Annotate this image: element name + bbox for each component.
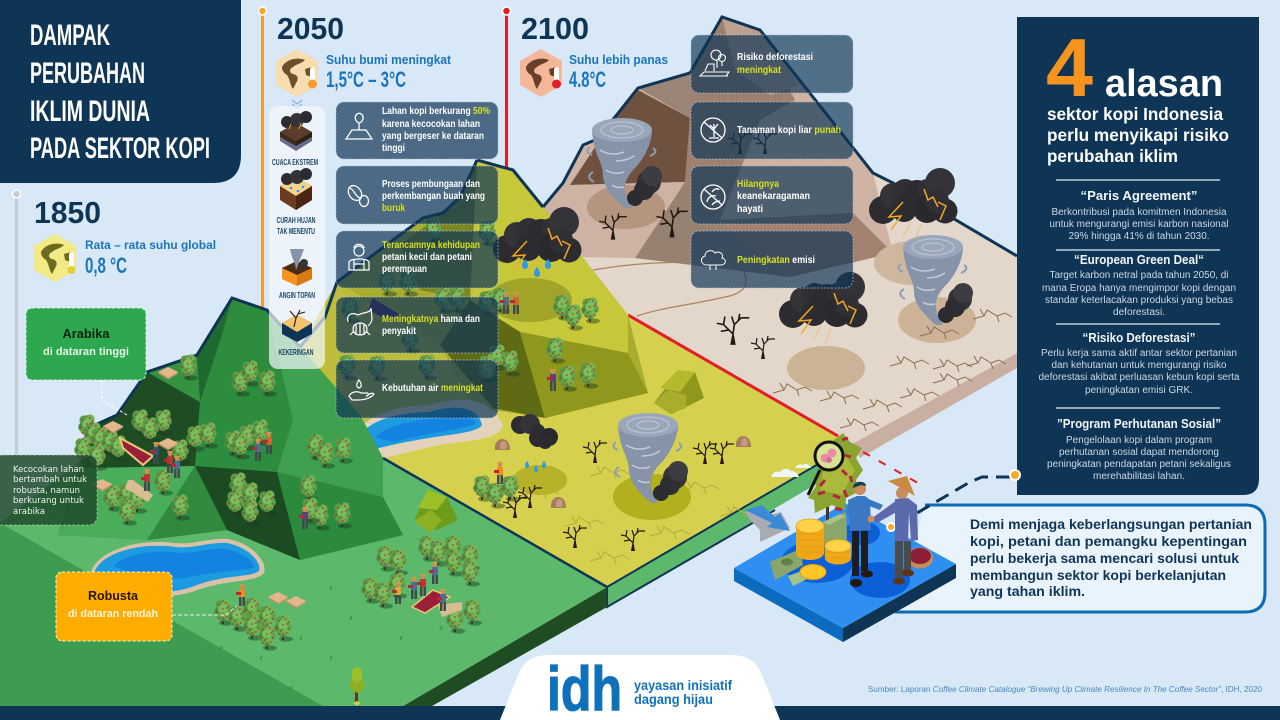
label: curah hujan: CURAH HUJAN	[276, 215, 316, 225]
small isometric tree	[350, 667, 364, 706]
panel: kehidupan petani: perempuan	[382, 264, 427, 275]
panel: pembungaan: Proses pembungaan dan	[382, 179, 480, 190]
reason: Program Perhutanan Sosial: Pengelolaan kopi dalam program	[1066, 435, 1212, 446]
reason: Risiko Deforestasi: “Risiko Deforestasi”	[1082, 331, 1196, 345]
section: 2100	[520, 11, 668, 97]
label: arabika	[26, 308, 146, 380]
farmers	[141, 292, 556, 611]
panel: hama dan penyakit	[336, 297, 498, 353]
panel: lahan kopi: Lahan kopi berkurang 50%	[382, 106, 490, 117]
reason: Risiko Deforestasi	[1038, 331, 1240, 396]
callout: kecocokan lahan: bertambah untuk	[13, 475, 87, 485]
icon: globe 2050	[276, 49, 318, 97]
panel: kebutuhan air: Kebutuhan air meningkat	[382, 383, 484, 394]
panel: hama dan penyakit: penyakit	[382, 326, 417, 337]
panels: 2100 impacts	[691, 35, 853, 288]
bare trees	[503, 131, 777, 551]
panel: 4 alasan: alasan	[1105, 63, 1223, 105]
terrain: 2100 dry land and brown mountain	[543, 17, 1017, 458]
panel: kopi liar punah: Tanaman kopi liar punah	[737, 125, 841, 136]
reason: European Green Deal: mana Eropa hanya mengimpor kopi dengan	[1042, 283, 1236, 294]
tornadoes	[587, 118, 973, 503]
footer bar	[0, 706, 1280, 720]
reason: European Green Deal: Target karbon netral pada tahun 2050, di	[1050, 270, 1228, 281]
panels: 2050 impacts	[336, 102, 498, 418]
title block	[0, 0, 241, 183]
reason: European Green Deal	[1042, 253, 1236, 318]
panel: 4 alasan	[1017, 17, 1259, 495]
reason: Program Perhutanan Sosial	[1047, 417, 1231, 482]
terrain: green mountain	[58, 298, 403, 560]
section: 2050	[276, 11, 452, 97]
panel: peningkatan emisi	[691, 231, 853, 288]
dot	[887, 523, 895, 531]
title block: PADA SEKTOR KOPI	[30, 132, 210, 165]
reason: Program Perhutanan Sosial: peningkatan pendapatan petani sekaligus	[1047, 459, 1231, 470]
section: 1850: Rata – rata suhu global	[85, 238, 216, 252]
reason: European Green Deal: deforestasi.	[1113, 307, 1165, 318]
storm clouds	[493, 168, 958, 472]
stumps	[495, 436, 751, 508]
connector: robusta	[172, 606, 237, 615]
panel: risiko deforestasi	[691, 35, 853, 93]
title block: PERUBAHAN	[30, 57, 145, 90]
callout: kecocokan lahan	[0, 455, 97, 525]
section: 1850: 0,8 °C	[85, 253, 127, 278]
arrow	[745, 505, 790, 542]
section: 2100: Suhu lebih panas	[569, 53, 668, 67]
dry cracks	[773, 309, 1012, 431]
callout: kecocokan lahan: arabika	[13, 507, 45, 517]
label: kekeringan: KEKERINGAN	[278, 347, 314, 357]
title block: DAMPAK	[30, 19, 110, 52]
label: arabika: Arabika	[62, 327, 111, 341]
panel: kebutuhan air	[336, 360, 498, 418]
callout: kecocokan lahan: berkurang untuk	[13, 496, 84, 506]
panel: kehidupan petani: petani kecil dan petani	[382, 252, 472, 263]
reason: European Green Deal: “European Green Deal“	[1074, 253, 1204, 267]
panel: keanekaragaman hayati: Hilangnya	[737, 179, 779, 190]
coffee trees: yellow mountain	[338, 217, 600, 509]
person: farmer with conical hat	[868, 476, 918, 584]
callout: kecocokan lahan: Kecocokan lahan	[13, 465, 84, 475]
label: cuaca ekstrem: CUACA EKSTREM	[272, 157, 318, 167]
panel: 4 alasan: sektor kopi Indonesia	[1047, 104, 1223, 124]
reason: European Green Deal: standar keterlacakan produksi yang bebas	[1045, 295, 1233, 306]
coffee tree	[808, 433, 863, 522]
reason: Risiko Deforestasi: Perlu kerja sama aktif antar sektor pertanian	[1041, 348, 1237, 359]
small white clouds	[771, 464, 811, 477]
panel: 4 alasan: perlu menyikapi risiko	[1047, 125, 1229, 145]
panel: keanekaragaman hayati	[691, 166, 853, 224]
lake: upper	[350, 400, 503, 458]
rocks: yellow	[654, 370, 704, 414]
timeline: 2050 line	[258, 7, 266, 312]
callout: solusi: kopi, petani dan pemangku kepentingan	[970, 534, 1247, 549]
timeline: 2100 line	[502, 7, 510, 170]
icon: cuaca ekstrem block	[280, 111, 312, 151]
panel: keanekaragaman hayati: keanekaragaman	[737, 191, 810, 202]
reason: Paris Agreement: 29% hingga 41% di tahun 2030.	[1068, 231, 1210, 242]
coffee trees: green area	[74, 354, 482, 651]
icon: curah hujan block	[280, 168, 312, 210]
panel: risiko deforestasi: Risiko deforestasi	[737, 52, 813, 63]
logo: idh tab: yayasan inisiatif	[634, 678, 732, 693]
panel: risiko deforestasi: meningkat	[737, 65, 782, 76]
section: 2050: Suhu bumi meningkat	[326, 53, 452, 67]
callout: solusi: membangun sektor kopi berkelanjutan	[970, 568, 1226, 583]
terrain: 2050 yellow plane	[383, 315, 852, 607]
source note: Sumber: Laporan Coffee Climate Catalogue “Brewing Up Climate Resilience In The Coffee Sector” , IDH, 2020	[868, 685, 1263, 694]
lake: lower	[90, 539, 265, 597]
money	[770, 512, 847, 586]
label: curah hujan: TAK MENENTU	[277, 226, 315, 236]
reason: Risiko Deforestasi: peningkatan emisi GRK.	[1085, 385, 1193, 396]
timeline: 1850 line	[12, 190, 20, 460]
red dashed line	[863, 452, 918, 483]
connector: arabika	[102, 381, 127, 415]
reason: Program Perhutanan Sosial: perhutanan sosial dapat mendorong	[1059, 447, 1219, 458]
person: man in blue sweater	[846, 482, 883, 587]
callout: solusi	[895, 505, 1265, 612]
ground shadows	[513, 185, 976, 520]
section: 2050: 1,5°C – 3°C	[326, 67, 406, 92]
title block: IKLIM DUNIA	[30, 95, 150, 128]
label: robusta: Robusta	[88, 589, 139, 603]
panel: pembungaan	[336, 166, 498, 224]
reason: Program Perhutanan Sosial: ”Program Perhutanan Sosial”	[1057, 417, 1221, 431]
callout: kecocokan lahan: robusta, namun	[13, 486, 80, 496]
label: angin topan: ANGIN TOPAN	[279, 290, 315, 300]
panel: lahan kopi	[336, 102, 498, 159]
section: 1850	[34, 195, 216, 282]
section: 2050: 2050	[277, 11, 344, 46]
panel: lahan kopi: tinggi	[382, 143, 405, 154]
panel: 4 alasan: perubahan iklim	[1047, 146, 1178, 166]
panel: keanekaragaman hayati: hayati	[737, 204, 763, 215]
callout: solusi: Demi menjaga keberlangsungan pertanian	[970, 517, 1252, 532]
terrain: green plane	[0, 458, 607, 706]
panel: hama dan penyakit: Meningkatnya hama dan	[382, 314, 480, 325]
callout: solusi: perlu bekerja sama mencari solusi untuk	[970, 551, 1239, 566]
reason: Paris Agreement: Berkontribusi pada komitmen Indonesia	[1052, 207, 1227, 218]
reason: Paris Agreement: untuk mengurangi emisi karbon nasional	[1050, 219, 1228, 230]
reason: Program Perhutanan Sosial: merehabilitasi lahan.	[1093, 471, 1185, 482]
platform	[734, 503, 956, 642]
label: curah hujan	[276, 215, 316, 236]
terrain: 2050 yellow mountain	[300, 160, 648, 430]
icon: angin topan block	[282, 249, 312, 286]
label: robusta: di dataran rendah	[68, 608, 158, 620]
panel: lahan kopi: yang bergeser ke dataran	[382, 131, 484, 142]
panel: peningkatan emisi: Peningkatan emisi	[737, 255, 815, 266]
panel: 4 alasan: 4	[1046, 21, 1093, 114]
callout: solusi: yang tahan iklim.	[970, 584, 1085, 599]
panel: kehidupan petani: Terancamnya kehidupan	[382, 240, 480, 251]
basket	[907, 548, 933, 568]
panel: pembungaan: perkembangan buah yang	[382, 191, 485, 202]
panel: pembungaan: buruk	[382, 203, 405, 214]
section: 2100: 4.8°C	[569, 67, 606, 92]
reason: Risiko Deforestasi: deforestasi akibat perluasan kebun kopi serta	[1038, 372, 1240, 383]
section: 1850: 1850	[34, 195, 101, 230]
icon: globe 2100	[520, 49, 562, 97]
icon: globe 1850	[34, 234, 76, 282]
reason: Paris Agreement	[1050, 189, 1228, 242]
drying mats and sacks	[92, 297, 462, 617]
icon: kekeringan block	[282, 310, 312, 342]
section: 2100: 2100	[521, 11, 589, 46]
icon strip: 2050 impacts	[269, 100, 325, 369]
rocks: green	[414, 490, 458, 533]
connector: dashed link to reasons panel	[917, 470, 1020, 513]
label: robusta	[56, 572, 172, 641]
logo: idh tab	[500, 655, 780, 720]
label: arabika: di dataran tinggi	[43, 346, 129, 358]
panel: kopi liar punah	[691, 102, 853, 159]
reason: Risiko Deforestasi: dan kehutanan untuk mengurangi risiko	[1052, 360, 1227, 371]
panel: kehidupan petani	[336, 231, 498, 288]
magnifier	[808, 442, 843, 495]
coins	[796, 519, 851, 580]
logo: idh tab: dagang hijau	[634, 692, 713, 707]
panel: lahan kopi: karena kecocokan lahan	[382, 119, 480, 130]
scene: collaboration platform	[734, 433, 956, 642]
reason: Paris Agreement: “Paris Agreement”	[1080, 189, 1198, 203]
